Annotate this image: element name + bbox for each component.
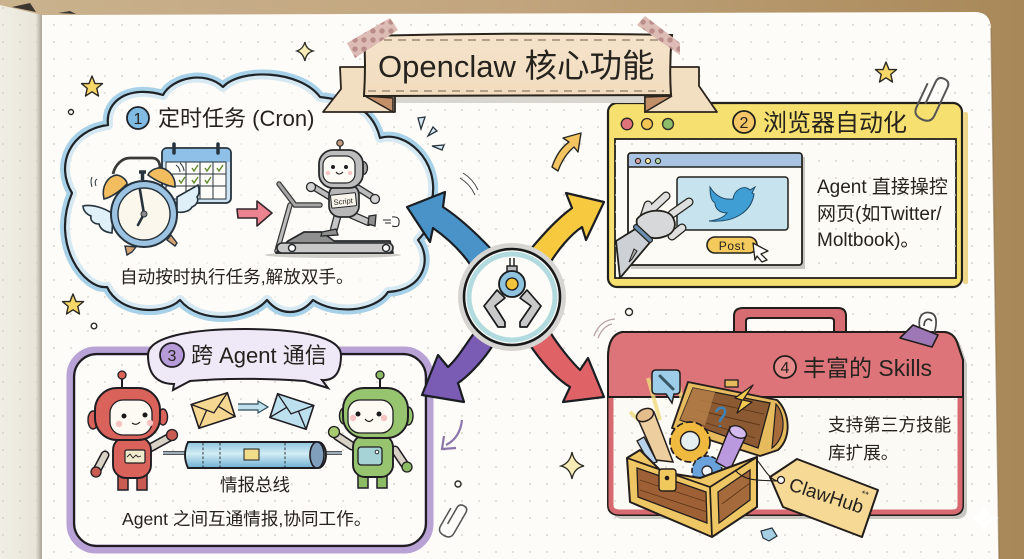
icon: running robot [306,140,399,236]
purple scroll [716,427,746,470]
small rings [68,110,632,487]
button: post [707,237,757,253]
star: top left [82,76,102,96]
panel 1: cron cloud [65,74,433,317]
scroll [637,412,673,462]
banner face [364,34,672,96]
icon: cursor [753,243,768,262]
chest lid [672,382,788,456]
arrow: yellow [530,193,604,263]
arrow: blue [407,192,492,267]
arrow: pink [237,201,272,226]
sparkle: top [297,42,313,61]
badge 4: 4 [781,360,790,377]
banner folds [365,96,672,112]
button: post: Post [719,239,745,253]
speech bubble heading [148,329,341,390]
text: skills description: 支持第三方技能 [828,415,951,435]
center arrows [407,192,604,402]
tag: ClawHub: ** [860,488,870,500]
text: skills description [828,415,951,463]
tag: ClawHub [735,459,878,537]
illustration: browser window [616,153,805,278]
caption: cron: 自动按时执行任务,解放双手。 [120,267,354,287]
badge 2: 2 [740,115,749,132]
spark ticks: cloud right [418,117,444,150]
paperclip: top right [913,73,950,124]
speech bubble heading: 跨 Agent 通信 [191,343,327,368]
speech bubble heading: 3 [168,348,177,365]
star: left middle [62,294,84,314]
heading: browser automation: 浏览器自动化 [763,110,907,137]
caption: agent communication: Agent 之间互通情报,协同工作。 [122,509,371,529]
center claw emblem [458,243,566,351]
icon: binder clip [900,313,938,347]
heading: cron: 定时任务 (Cron) [158,106,314,131]
washi tape right [637,16,680,55]
text: browser description [817,176,948,251]
arrow: small purple [442,420,462,449]
star: top right [876,62,896,82]
chest body [627,450,757,537]
banner title [323,16,717,112]
heading: skills: 丰富的 Skills [803,355,932,381]
arrow: small yellow [552,133,581,171]
arrow: envelope transfer [238,401,268,413]
arrow: red [530,332,604,402]
icon: bird [709,187,755,221]
icon: treasure chest [627,370,788,537]
washi tape left [347,18,398,58]
icon: blue envelope [270,394,314,429]
motion ticks [460,173,478,195]
badge 1 [127,107,149,129]
icon: treadmill [265,184,401,258]
gears [670,422,710,462]
corner sparkle [969,503,999,533]
text: browser description: 网页(如Twitter/ [817,203,942,225]
text: browser description: Moltbook)。 [817,230,919,251]
blue gem [761,528,777,541]
icon: red robot [88,371,178,490]
text: skills description: 库扩展。 [828,443,898,463]
paperclip: bottom [437,501,468,539]
motion ticks: red [594,319,615,338]
title text: Openclaw 核心功能 [378,48,654,84]
text: browser description: Agent 直接操控 [817,176,948,198]
icon: green robot [328,371,413,488]
icon: running robot: Script [333,196,354,207]
label: information bus: 情报总线 [220,475,290,495]
icon: robot hand [616,196,689,278]
icon: robot claw [484,258,541,327]
panel 4: skills toolbox [608,308,967,537]
icon: calendar [162,144,231,203]
banner right tail [645,67,717,112]
badge 1: 1 [134,111,143,128]
window controls [621,118,674,130]
icon: wrench bubble [652,370,680,403]
badge 2 [733,111,755,133]
tag: ClawHub: ClawHub [786,475,866,518]
icon: information bus cylinder [163,442,342,468]
arrow: purple [422,332,493,402]
icon: yellow envelope [191,393,235,428]
banner left tail [323,67,395,112]
badge 4 [774,356,796,378]
panel 3: agent communication [71,329,429,549]
banner shadow [370,96,670,103]
sparkle: bottom [561,452,584,479]
panel 2: browser automation [608,103,968,287]
icon: winged alarm clock [83,158,199,255]
